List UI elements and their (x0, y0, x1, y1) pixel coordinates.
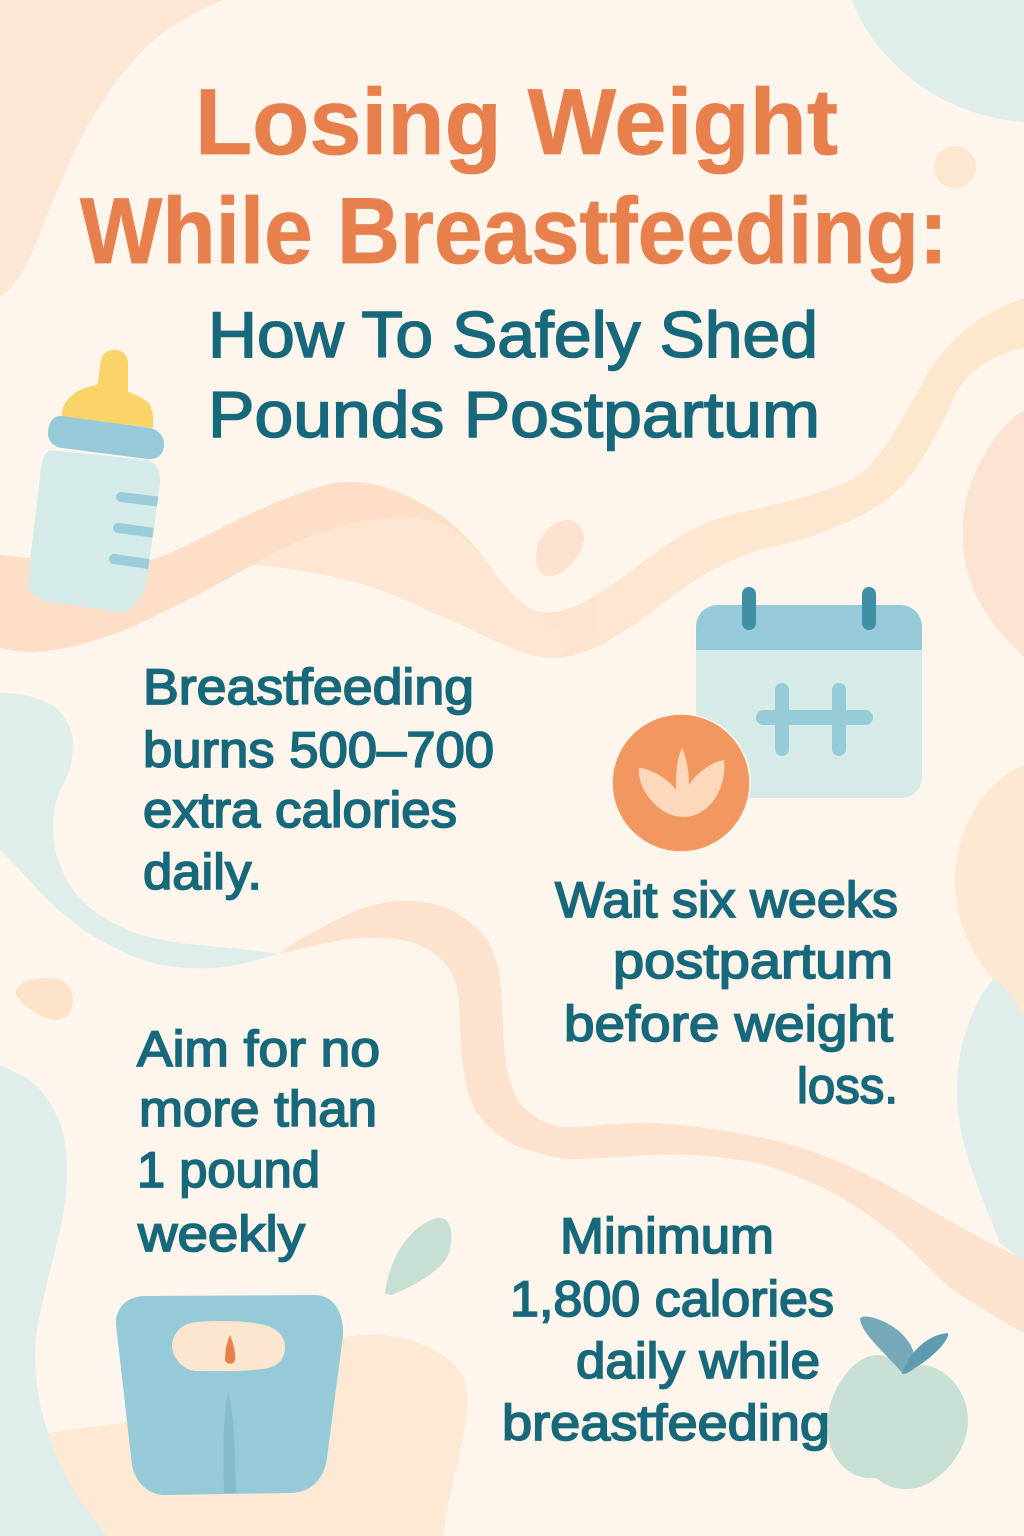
icon: bathroom scale (116, 1295, 343, 1495)
title (80, 69, 948, 283)
text: breastfeeding burns calories: daily. (143, 844, 262, 900)
text: breastfeeding burns calories: extra calories (143, 782, 457, 838)
subtitle: Pounds Postpartum (208, 378, 820, 451)
text: breastfeeding burns calories: Breastfeeding (143, 659, 474, 715)
text: minimum calories: 1,800 calories (510, 1271, 834, 1327)
blob: left teal swoosh (0, 693, 279, 968)
icon: falling leaf (385, 1218, 451, 1295)
bottle measure marks (114, 497, 170, 567)
text: wait six weeks (555, 872, 898, 1114)
scale dial (172, 1321, 285, 1371)
calendar marks (756, 683, 873, 756)
text: minimum calories (502, 1208, 834, 1451)
text: aim for no more than 1 pound: weekly (137, 1206, 305, 1262)
blob: right peach (963, 410, 1024, 657)
apple right leaf (902, 1333, 948, 1374)
wave: center band (279, 901, 1024, 1333)
blob: small peach left (16, 978, 73, 1020)
icon: orange circle with leaf (612, 714, 750, 852)
scale seam (223, 1392, 236, 1493)
text: minimum calories: breastfeeding (502, 1395, 830, 1451)
scale needle (225, 1335, 235, 1364)
text: wait six weeks: before weight (564, 996, 893, 1052)
text: aim for no more than 1 pound (137, 1021, 380, 1262)
blob: right teal (957, 978, 1024, 1262)
text: breastfeeding burns calories (143, 659, 494, 900)
blob: bottom left teal (0, 1065, 107, 1536)
text: aim for no more than 1 pound: more than (139, 1081, 377, 1137)
bottle body (28, 450, 160, 612)
text: minimum calories: Minimum (560, 1208, 774, 1264)
calendar rings (742, 587, 756, 630)
icon: calendar (696, 587, 922, 798)
calendar header (696, 605, 922, 650)
icon: apple (827, 1316, 968, 1489)
subtitle (208, 298, 820, 451)
wave: upper band (0, 298, 1024, 658)
text: wait six weeks: loss. (797, 1058, 898, 1114)
apple left leaf (860, 1316, 914, 1374)
title: Losing Weight (195, 69, 838, 174)
wave: lighter lower band (253, 518, 570, 658)
blob: small peach oval (536, 520, 584, 576)
text: wait six weeks: postpartum (613, 933, 893, 989)
text: minimum calories: daily while (576, 1333, 820, 1389)
title: While Breastfeeding: (80, 178, 948, 283)
subtitle: How To Safely Shed (208, 298, 818, 371)
blob: top left peach (0, 0, 223, 297)
text: aim for no more than 1 pound: Aim for no (137, 1021, 380, 1077)
blob: bottom yellow (48, 1335, 467, 1536)
apple body (827, 1355, 968, 1489)
bottle collar (48, 416, 164, 459)
text: wait six weeks: Wait six weeks (555, 872, 898, 928)
icon: baby bottle (28, 350, 170, 612)
calendar page (696, 650, 922, 798)
text: breastfeeding burns calories: burns 500–700 (143, 722, 494, 778)
blob: right yellow (955, 765, 1024, 1020)
text: aim for no more than 1 pound: 1 pound (137, 1142, 320, 1198)
bottle nipple (62, 350, 153, 428)
scale body (116, 1295, 343, 1495)
leaf (639, 748, 724, 817)
dot: top right (934, 146, 976, 188)
blob: top right teal (852, 0, 1024, 122)
